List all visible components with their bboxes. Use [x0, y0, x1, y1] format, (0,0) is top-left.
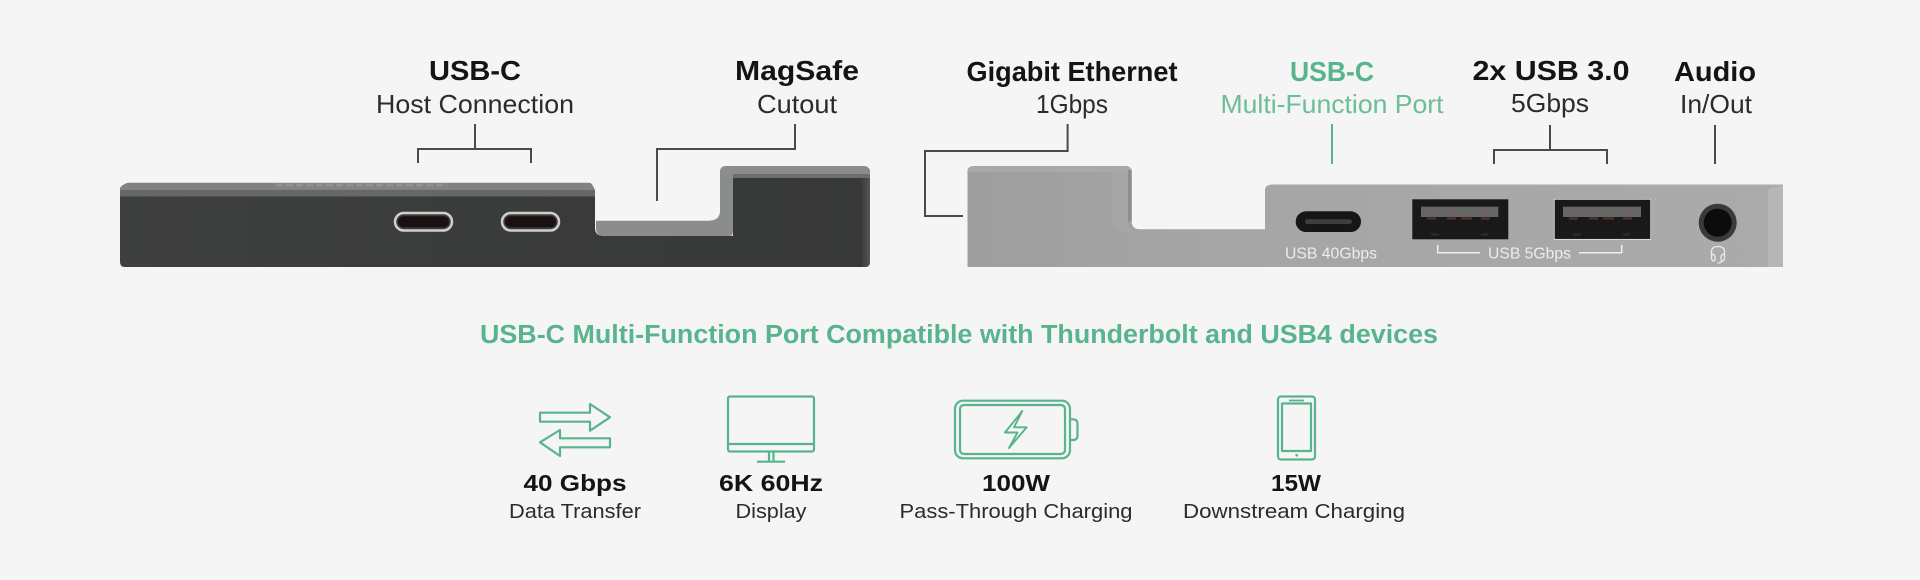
- label: USB-C multi-function port: USB-C: [1290, 56, 1374, 87]
- notch floor and tall wall: [596, 166, 870, 236]
- text: downstream charging: Downstream Charging: [1183, 500, 1405, 523]
- label: MagSafe cutout: Cutout: [757, 89, 838, 119]
- text: data transfer: Data Transfer: [509, 500, 641, 523]
- label: 2x USB 3.0: 2x USB 3.0: [1472, 55, 1630, 86]
- text: pass-through charging: Pass-Through Charging: [900, 500, 1132, 523]
- label: audio in/out: Audio: [1674, 56, 1756, 87]
- icon: headphones: [1712, 246, 1724, 263]
- leader: MagSafe cutout: [657, 124, 795, 201]
- icon: monitor: [728, 396, 814, 462]
- tall right edge: [1128, 170, 1132, 222]
- text: USB 5Gbps with bracket: [1438, 245, 1622, 262]
- heading: compatibility: USB-C Multi-Function Port Compatible with Thunderbolt and USB4 devices: [480, 321, 1438, 349]
- leader: USB-C multi-function port: [1331, 124, 1333, 164]
- leader: Gigabit Ethernet: [925, 124, 1068, 216]
- tall top bevel: [968, 166, 1132, 172]
- label: USB-C multi-function port: Multi-Function Port: [1220, 89, 1444, 119]
- label: audio in/out: In/Out: [1680, 89, 1753, 119]
- embossed logo strip: [276, 184, 447, 186]
- text: 15W: 15W: [1271, 470, 1322, 496]
- label: USB-C host connection: [376, 55, 574, 119]
- label: 2x USB 3.0: [1472, 55, 1630, 118]
- leader: USB-C host bracket: [418, 124, 531, 163]
- device: left side dark hub: [120, 166, 870, 267]
- feature: pass-through charging: [900, 401, 1132, 523]
- label: Gigabit Ethernet: Gigabit Ethernet: [966, 56, 1178, 87]
- feature: downstream charging: [1183, 396, 1405, 523]
- text: display: Display: [736, 500, 807, 523]
- leader: audio: [1714, 125, 1716, 164]
- right edge: [862, 176, 870, 267]
- label: Gigabit Ethernet: 1Gbps: [1036, 89, 1108, 119]
- text: USB 5Gbps with bracket: USB 5Gbps: [1488, 245, 1571, 262]
- icon: arrows: [540, 404, 610, 456]
- label: 2x USB 3.0: 5Gbps: [1511, 88, 1589, 118]
- text: 40 Gbps: 40 Gbps: [524, 470, 626, 496]
- label: audio in/out: [1674, 56, 1756, 119]
- icon: USB-A port 2: [1554, 199, 1651, 239]
- icon: host USB-C port 2: [502, 213, 559, 230]
- device: right side silver hub: [968, 166, 1783, 267]
- dark body: [120, 174, 870, 267]
- text: 6K 60Hz: 6K 60Hz: [719, 470, 823, 496]
- text: USB 40Gbps: USB 40Gbps: [1285, 245, 1377, 262]
- icon: host USB-C port 1: [395, 213, 452, 230]
- label: USB-C host connection: USB-C: [429, 55, 521, 86]
- end cap: [1768, 186, 1783, 267]
- leader: USB 3.0 bracket: [1494, 125, 1607, 164]
- icon: battery: [955, 401, 1078, 458]
- bevel shade band: [120, 190, 595, 197]
- icon: USB-C 40Gbps port: [1296, 211, 1361, 232]
- label: USB-C multi-function port: [1220, 56, 1444, 119]
- label: MagSafe cutout: [735, 55, 859, 119]
- feature: data transfer: [509, 404, 641, 523]
- tall inner wall: [1112, 172, 1135, 232]
- tall top shade: [733, 174, 870, 178]
- top bevel: [120, 183, 595, 197]
- feature: display: [719, 396, 823, 523]
- label: USB-C host connection: Host Connection: [376, 89, 574, 119]
- icon: audio jack: [1699, 204, 1737, 242]
- text: 100W: 100W: [982, 470, 1051, 496]
- icon: USB-A port 1: [1412, 199, 1508, 239]
- silver body: [968, 166, 1783, 267]
- label: MagSafe cutout: MagSafe: [735, 55, 859, 86]
- label: Gigabit Ethernet: [966, 56, 1178, 119]
- icon: phone: [1278, 396, 1315, 460]
